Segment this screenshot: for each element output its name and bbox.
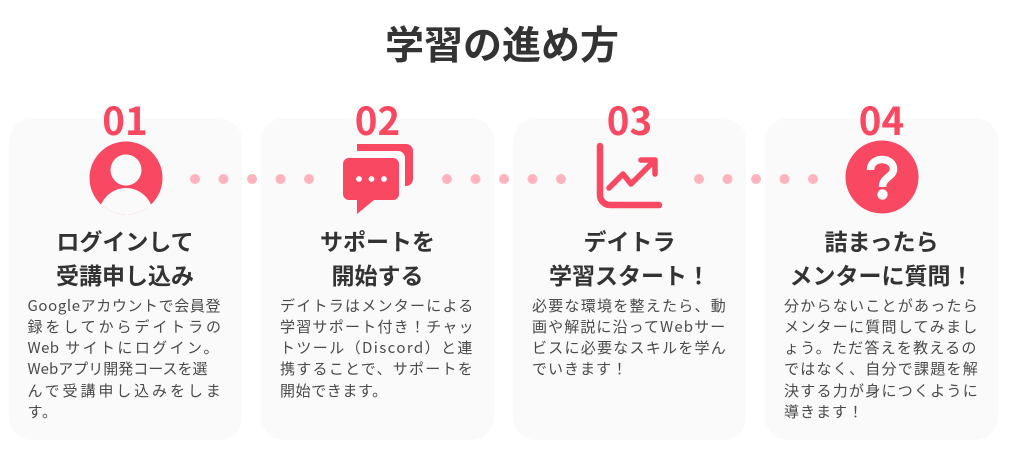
icon: question mark (846, 140, 918, 214)
number 04: 04 (859, 91, 904, 147)
text block 1: Webアプリ開発コースを選 (28, 358, 208, 379)
text block 2: 携することで、サポートを (280, 358, 474, 379)
heading 2 (320, 223, 435, 290)
heading 2: サポートを (320, 223, 435, 257)
panel: step 2 card (261, 118, 494, 440)
heading 1 (56, 223, 194, 290)
text block 1 (28, 294, 224, 422)
heading 1: ログインして (56, 223, 194, 257)
icon: user (90, 142, 162, 214)
text block 1: Googleアカウントで会員登 (28, 294, 221, 316)
heading 2: 開始する (332, 256, 424, 290)
text block 2 (280, 294, 475, 401)
panel: step 1 card (8, 118, 242, 440)
text block 1: んで受講申し込みをしま (28, 380, 224, 401)
text block 3 (532, 294, 727, 379)
connector dots 1 to 2 (190, 174, 314, 184)
text block 1: 録をしてからデイトラの (28, 316, 224, 337)
text block 4: 導きます！ (784, 401, 864, 422)
text block 3: でいきます！ (532, 358, 628, 379)
text block 4: 決する力が身につくように (784, 380, 979, 401)
text block 4: ではなく、自分で課題を解 (784, 358, 979, 379)
text block 4 (784, 294, 979, 422)
heading 4: 詰まったら (824, 223, 939, 257)
text block 2: 学習サポート付き！チャッ (280, 316, 475, 337)
number 02: 02 (355, 91, 400, 147)
heading 3: 学習スタート！ (549, 256, 710, 290)
heading 1: 受講申し込み (56, 256, 194, 290)
text block 2: デイトラはメンターによる (280, 294, 475, 316)
title: 学習の進め方 (385, 15, 619, 71)
text block 1: す。 (28, 401, 58, 422)
text block 3: 必要な環境を整えたら、動 (532, 294, 727, 316)
text block 3: 画や解説に沿ってWebサー (532, 316, 726, 337)
icon: chat bubbles (343, 144, 413, 214)
connector dots 3 to 4 (694, 174, 818, 184)
text block 2: 開始できます。 (280, 380, 388, 401)
text block 4: メンターに質問してみまし (784, 316, 979, 337)
heading 3 (549, 223, 710, 290)
text block 4: 分からないことがあったら (784, 294, 979, 316)
number 03: 03 (607, 91, 652, 147)
panel: step 4 card (765, 118, 998, 440)
heading 4 (790, 223, 974, 290)
text block 1: Web サイトにログイン。 (28, 337, 221, 358)
icon: growth chart (596, 142, 662, 208)
connector dots 2 to 3 (442, 174, 566, 184)
panel: step 3 card (513, 118, 746, 440)
number 01: 01 (102, 91, 148, 147)
heading 4: メンターに質問！ (790, 256, 974, 290)
heading 3: デイトラ (584, 223, 676, 257)
text block 4: ょう。ただ答えを教えるの (784, 337, 978, 358)
text block 2: トツール（Discord）と連 (280, 337, 474, 358)
text block 3: ビスに必要なスキルを学ん (532, 337, 727, 358)
